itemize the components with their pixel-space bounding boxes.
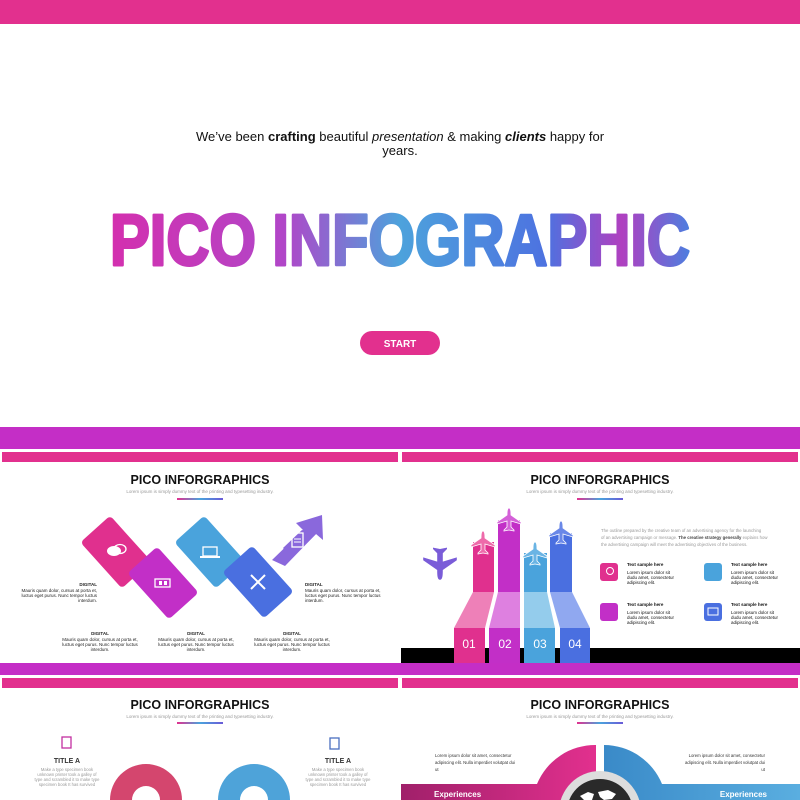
text: right digital: interdum. — [305, 598, 324, 603]
item 4: unknown printer took a galley of — [308, 772, 368, 777]
tile: arrow clipboard — [272, 515, 323, 566]
text: bottom digital row: luctus eget purus. Nunc tempor luctus — [254, 642, 331, 647]
bar 02 — [489, 508, 521, 664]
text left: Lorem ipsum dolor sit amet, consectetur — [435, 753, 512, 758]
feature items: Lorem ipsum dolor sit — [627, 610, 671, 615]
tile: chat — [80, 516, 152, 588]
item 4: type and scrambled it to make type — [306, 777, 371, 782]
bar 03: 03 — [533, 637, 547, 651]
text: bottom digital row: interdum. — [283, 647, 301, 652]
section bars lower — [0, 663, 800, 688]
feature items: dudu amet, consectetur — [627, 575, 675, 580]
feature items: Text sample here — [731, 562, 768, 567]
subheading: Lorem ipsum is simply dummy text of the printing and typesetting industry. — [126, 489, 274, 494]
paragraph: the advertising campaign will meet the advertising objectives of the business. — [601, 542, 747, 547]
heading: PICO INFORGRAPHICS — [531, 473, 669, 487]
text left: adipiscing elit. Nulla imperdiet volutpat dui — [435, 760, 515, 765]
feature items: Lorem ipsum dolor sit — [731, 570, 775, 575]
panel: wave tiles — [21, 473, 381, 652]
panel: experiences — [401, 698, 800, 800]
subheading: Lorem ipsum is simply dummy text of the printing and typesetting industry. — [526, 714, 674, 719]
arch blue — [218, 764, 290, 800]
item 1 — [35, 737, 100, 787]
bar 01: 01 — [462, 637, 476, 651]
feature items: dudu amet, consectetur — [731, 615, 779, 620]
heading: PICO INFORGRAPHICS — [131, 473, 269, 487]
bar 03 — [523, 542, 555, 664]
icon: plane — [423, 548, 457, 580]
feature items: adipiscing elit. — [731, 580, 759, 585]
text right: ut — [761, 767, 766, 772]
feature items: Text sample here — [627, 602, 664, 607]
text: bottom digital row: DIGITAL — [283, 631, 301, 636]
heading: PICO INFORGRAPHICS — [531, 698, 669, 712]
section bars — [0, 427, 800, 462]
feature items: Lorem ipsum dolor sit — [731, 610, 775, 615]
start button: START — [384, 339, 416, 350]
item 4: Make a type specimen book — [312, 767, 365, 772]
item 1: TITLE A — [54, 758, 80, 765]
text: bottom digital row: Mauris quam dolor, cursus at porta et, — [158, 637, 234, 642]
top bar — [0, 0, 800, 24]
text: bottom digital row: Mauris quam dolor, cursus at porta et, — [254, 637, 330, 642]
text: bottom digital row: DIGITAL — [187, 631, 205, 636]
text: right digital: DIGITAL — [305, 582, 323, 587]
item 1: specimen book It has survived — [39, 782, 96, 787]
text: bottom digital row: luctus eget purus. Nunc tempor luctus — [158, 642, 235, 647]
subheading: Lorem ipsum is simply dummy text of the printing and typesetting industry. — [126, 714, 274, 719]
feature items: adipiscing elit. — [627, 580, 655, 585]
bar 02: 02 — [498, 637, 512, 651]
text: bottom digital row: DIGITAL — [91, 631, 109, 636]
bar 01 — [454, 531, 495, 664]
paragraph: The outline prepared by the creative team of an advertising agency for the launching — [601, 528, 762, 533]
text: bottom digital row: interdum. — [91, 647, 109, 652]
panel: planes chart — [401, 473, 800, 664]
tile: laptop — [174, 516, 246, 588]
item 1: unknown printer took a galley of — [37, 772, 97, 777]
text: bottom digital row: Mauris quam dolor, cursus at porta et, — [62, 637, 138, 642]
item 1: type and scrambled it to make type — [35, 777, 100, 782]
feature items: adipiscing elit. — [627, 620, 655, 625]
text: left digital: interdum. — [78, 598, 97, 603]
text: right digital — [305, 582, 381, 603]
tagline: We’ve been crafting beautiful presentation & making clients happy for — [196, 129, 604, 144]
paragraph — [601, 528, 768, 547]
tile: battery — [127, 547, 199, 619]
item 4 — [306, 738, 371, 787]
pink band — [401, 745, 596, 800]
tagline: years. — [382, 143, 418, 158]
bar 04: 04 — [568, 637, 582, 651]
text: left digital — [21, 582, 98, 603]
labels: Experiences — [434, 790, 482, 799]
subheading: Lorem ipsum is simply dummy text of the printing and typesetting industry. — [526, 489, 674, 494]
bar 04 — [549, 521, 590, 664]
text left — [435, 753, 515, 772]
item 4: TITLE A — [325, 758, 351, 765]
main title: PICO INFOGRAPHIC — [110, 201, 690, 281]
text: left digital: luctus eget purus. Nunc tempor luctus — [21, 593, 98, 598]
text: bottom digital row — [62, 631, 331, 652]
feature items: adipiscing elit. — [731, 620, 759, 625]
text: right digital: luctus eget purus. Nunc tempor luctus — [305, 593, 381, 598]
item 4: specimen book It has survived — [310, 782, 367, 787]
arch red — [110, 764, 182, 800]
text right: adipiscing elit. Nulla imperdiet volutpat dui — [685, 760, 765, 765]
panel: experiences: Experiences — [720, 790, 768, 799]
heading: PICO INFORGRAPHICS — [131, 698, 269, 712]
blue band — [604, 745, 800, 800]
text: left digital: Mauris quam dolor, cursus at porta et, — [21, 588, 97, 593]
globe — [559, 771, 641, 800]
text right: Lorem ipsum dolor sit amet, consectetur — [689, 753, 766, 758]
black band — [401, 648, 800, 664]
paragraph: of an advertising campaign or message. The creative strategy generally explains how — [601, 535, 768, 540]
text: left digital: DIGITAL — [79, 582, 97, 587]
feature items: Text sample here — [731, 602, 768, 607]
start button — [360, 331, 440, 355]
feature items: Lorem ipsum dolor sit — [627, 570, 671, 575]
text: right digital: Mauris quam dolor, cursus at porta et, — [305, 588, 381, 593]
text: bottom digital row: luctus eget purus. Nunc tempor luctus — [62, 642, 139, 647]
feature items: dudu amet, consectetur — [731, 575, 779, 580]
feature items: dudu amet, consectetur — [627, 615, 675, 620]
text right — [685, 753, 766, 772]
text: bottom digital row: interdum. — [187, 647, 205, 652]
text left: ut — [435, 767, 439, 772]
feature items: Text sample here — [627, 562, 664, 567]
panel: arches — [35, 698, 371, 800]
feature items — [600, 562, 779, 625]
item 1: Make a type specimen book — [41, 767, 94, 772]
tile: tools — [222, 546, 294, 618]
